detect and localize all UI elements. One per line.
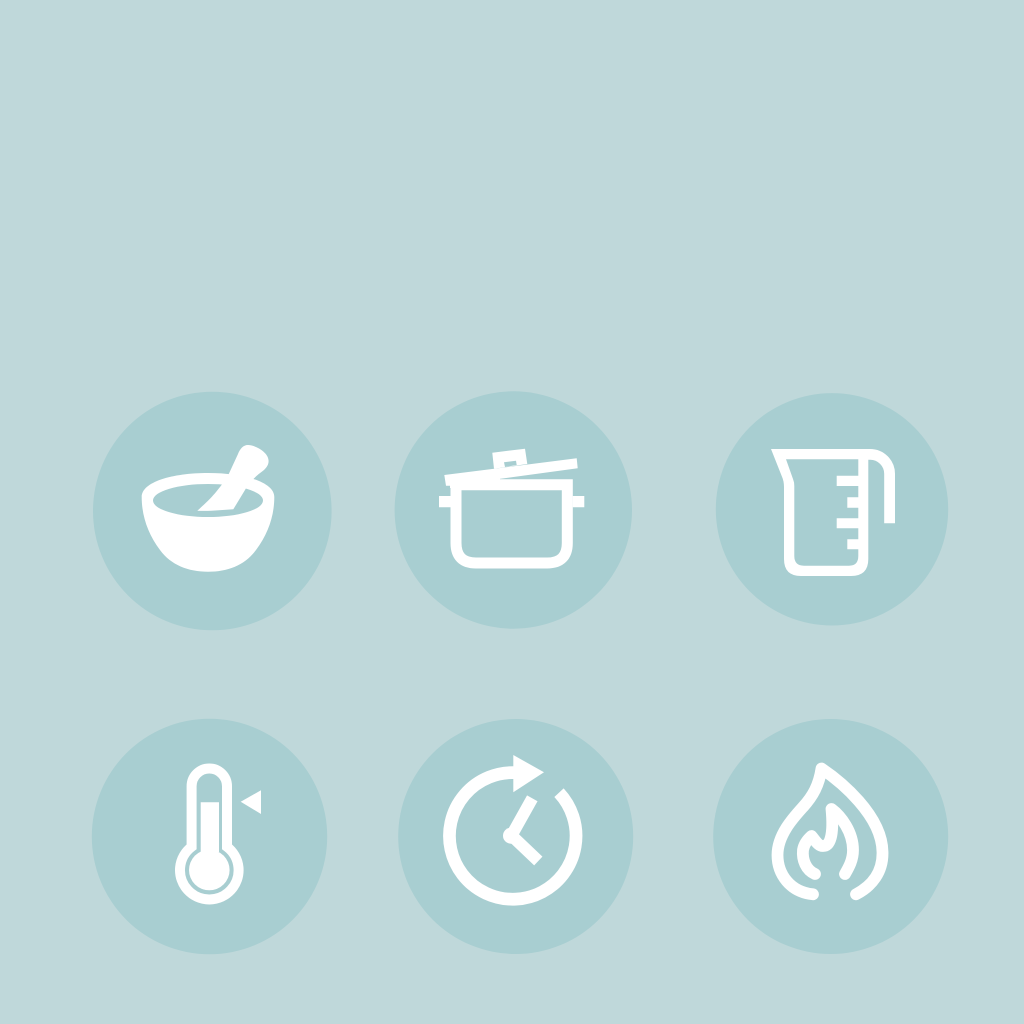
icon: clock with arrow — [398, 719, 633, 954]
icon: cooking pot — [395, 391, 632, 629]
icon: thermometer — [92, 719, 327, 954]
icon: measuring jug — [716, 393, 948, 626]
icon: flame — [713, 719, 948, 954]
icon: mortar and pestle — [93, 392, 332, 630]
